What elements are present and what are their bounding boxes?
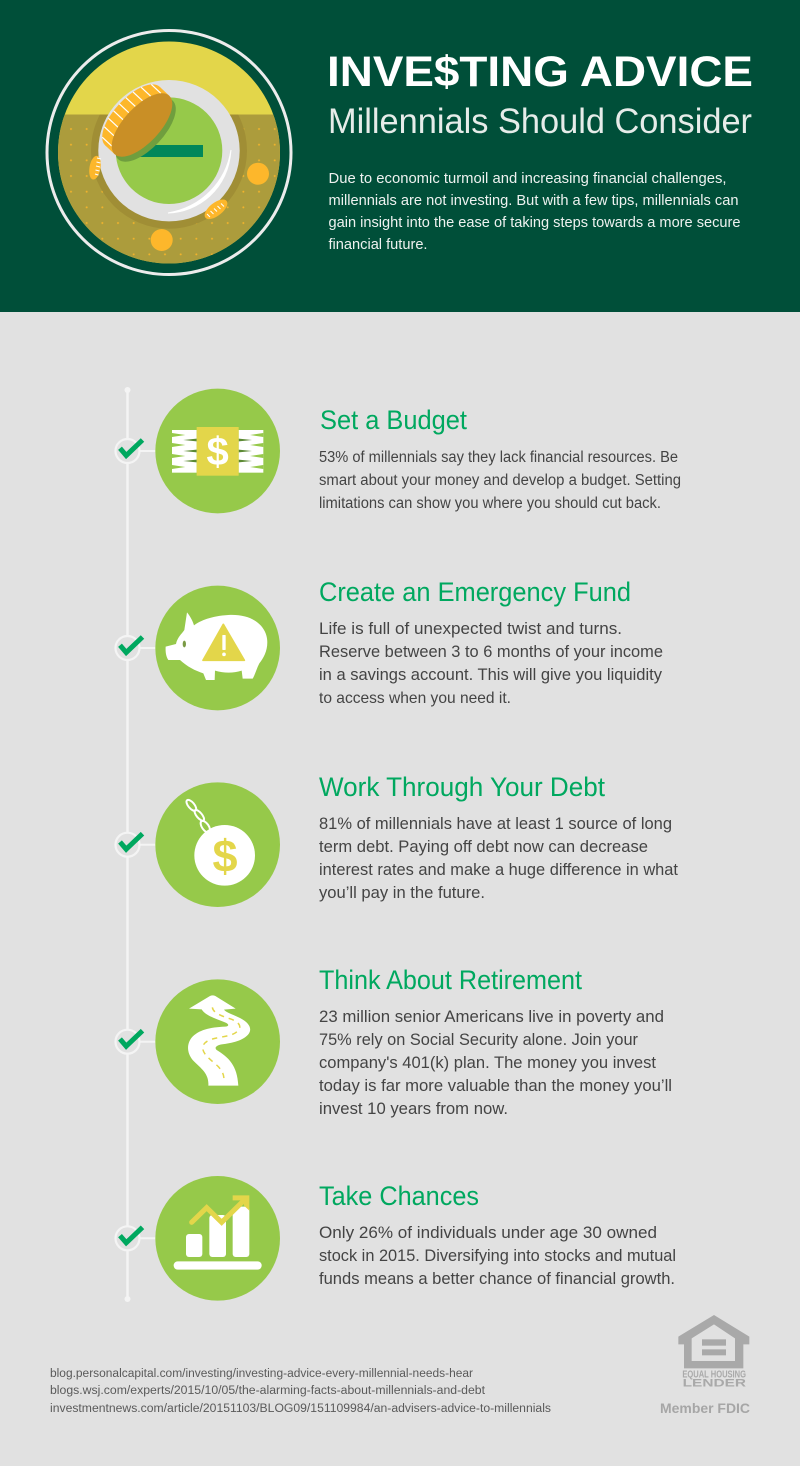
logo: equal housing lender xyxy=(678,1315,749,1390)
body text: invest 10 years from now. xyxy=(319,1100,508,1118)
sources xyxy=(50,1368,551,1415)
step 1: set a budget xyxy=(116,389,681,513)
body text: company's 401(k) plan. The money you invest xyxy=(319,1054,656,1072)
intro text xyxy=(328,170,740,253)
heading: Take Chances xyxy=(319,1181,479,1211)
intro text: gain insight into the ease of taking steps towards a more secure xyxy=(328,214,740,231)
icon: cash bundle: $ xyxy=(207,430,229,474)
body text: funds means a better chance of financial growth. xyxy=(319,1270,675,1288)
icon: piggy bank with warning xyxy=(155,586,280,710)
body text: Reserve between 3 to 6 months of your income xyxy=(319,643,663,661)
body text: 75% rely on Social Security alone. Join your xyxy=(319,1031,638,1049)
body text xyxy=(319,1224,676,1288)
title: INVE$TING ADVICE xyxy=(327,48,753,96)
icon: ball and chain xyxy=(155,782,280,907)
sources: blogs.wsj.com/experts/2015/10/05/the-alarming-facts-about-millennials-and-debt xyxy=(50,1385,486,1397)
heading: Create an Emergency Fund xyxy=(319,577,631,607)
step 4: think about retirement xyxy=(116,965,672,1118)
body text: smart about your money and develop a budget. Setting xyxy=(319,472,681,489)
heading: Think About Retirement xyxy=(319,965,582,995)
body text xyxy=(319,449,681,512)
body text: today is far more valuable than the money you’ll xyxy=(319,1077,672,1095)
body text xyxy=(319,1008,672,1118)
body text: in a savings account. This will give you liquidity xyxy=(319,666,663,684)
body text: Life is full of unexpected twist and turns. xyxy=(319,620,622,638)
checkmark 4 xyxy=(116,1030,158,1054)
icon: winding road xyxy=(155,979,280,1104)
logo: equal housing lender: LENDER xyxy=(683,1378,746,1390)
body text: 23 million senior Americans live in poverty and xyxy=(319,1008,664,1026)
subtitle: Millennials Should Consider xyxy=(328,102,752,141)
step 3: work through debt xyxy=(116,772,678,907)
body text: 53% of millennials say they lack financial resources. Be xyxy=(319,449,678,466)
illustration: coin dropping into slot xyxy=(47,30,291,274)
body text: you’ll pay in the future. xyxy=(319,884,485,902)
body text: stock in 2015. Diversifying into stocks and mutual xyxy=(319,1247,676,1265)
body text: limitations can show you where you should cut back. xyxy=(319,495,661,512)
sources: blog.personalcapital.com/investing/investing-advice-every-millennial-needs-hear xyxy=(50,1368,473,1380)
icon: cash bundle xyxy=(155,389,280,513)
step 5: take chances xyxy=(116,1176,676,1301)
checkmark 5 xyxy=(116,1226,158,1250)
intro text: millennials are not investing. But with a few tips, millennials can xyxy=(328,192,738,209)
body text xyxy=(319,620,663,707)
icon: ball and chain: $ xyxy=(212,831,238,882)
heading: Work Through Your Debt xyxy=(319,772,605,802)
logo: equal housing lender: EQUAL HOUSING xyxy=(682,1369,746,1380)
panel: header xyxy=(0,0,800,312)
sources: investmentnews.com/article/20151103/BLOG09/151109984/an-advisers-advice-to-millennials xyxy=(50,1403,551,1415)
intro text: Due to economic turmoil and increasing financial challenges, xyxy=(328,170,726,187)
intro text: financial future. xyxy=(328,236,428,253)
icon: growth chart xyxy=(155,1176,280,1301)
big coin xyxy=(92,75,182,167)
step 2: emergency fund xyxy=(116,577,663,710)
body text: 81% of millennials have at least 1 source of long xyxy=(319,815,672,833)
body text: Only 26% of individuals under age 30 owned xyxy=(319,1224,657,1242)
body text: to access when you need it. xyxy=(319,690,511,707)
timeline xyxy=(124,387,130,1302)
body text xyxy=(319,815,678,902)
member fdic: Member FDIC xyxy=(660,1400,750,1416)
heading: Set a Budget xyxy=(320,405,467,435)
checkmark 3 xyxy=(116,833,158,857)
checkmark 1 xyxy=(116,439,158,463)
body text: interest rates and make a huge difference in what xyxy=(319,861,678,879)
body text: term debt. Paying off debt now can decrease xyxy=(319,838,648,856)
checkmark 2 xyxy=(116,636,158,660)
